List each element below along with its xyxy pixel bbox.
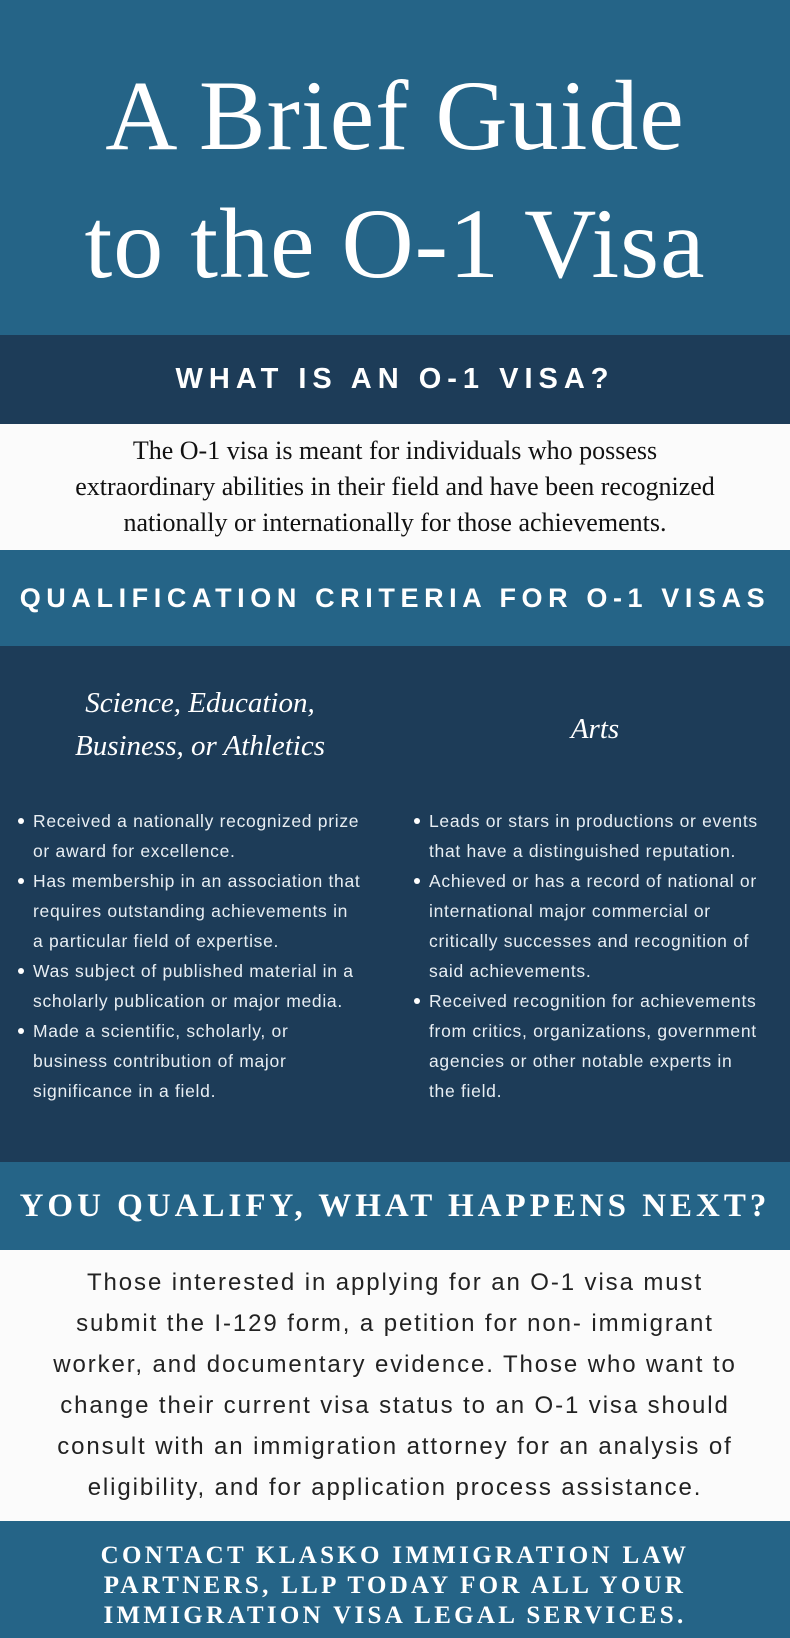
- title: to the O-1 Visa: [85, 188, 705, 299]
- footer: contact: [0, 1521, 790, 1638]
- footer: contact: PARTNERS, LLP TODAY FOR ALL YOUR: [104, 1572, 686, 1599]
- heading: next steps: YOU QUALIFY, WHAT HAPPENS NEXT?: [20, 1188, 770, 1224]
- heading: what is: [0, 335, 790, 424]
- subheading: science: [75, 687, 325, 762]
- title: A Brief Guide: [105, 60, 685, 171]
- header: [0, 0, 790, 335]
- text: definition: extraordinary abilities in their field and have been recognized: [75, 472, 715, 501]
- text: next steps: [0, 1250, 790, 1521]
- list: arts criteria: agencies or other notable experts in: [429, 1051, 732, 1071]
- subheading: science: Science, Education,: [85, 687, 315, 719]
- text: definition: [0, 424, 790, 550]
- text: next steps: worker, and documentary evidence. Those who want to: [53, 1351, 737, 1378]
- list: science criteria: requires outstanding achievements in: [33, 901, 348, 921]
- list: science criteria: a particular field of expertise.: [33, 931, 279, 951]
- list: science criteria: or award for excellence.: [33, 841, 236, 861]
- list: arts criteria: that have a distinguished reputation.: [429, 841, 736, 861]
- list: science criteria: Has membership in an association that: [33, 871, 360, 891]
- list: arts criteria: from critics, organizations, government: [429, 1021, 757, 1041]
- list: arts criteria: Achieved or has a record of national or: [429, 871, 757, 891]
- list: arts criteria: Received recognition for achievements: [429, 991, 756, 1011]
- subheading: arts: Arts: [571, 713, 619, 745]
- list: science criteria: Made a scientific, scholarly, or: [33, 1021, 288, 1041]
- title: [85, 60, 705, 299]
- list: arts criteria: [414, 811, 758, 1101]
- text: next steps: consult with an immigration attorney for an analysis of: [57, 1433, 733, 1460]
- panel: criteria columns: [0, 646, 790, 1162]
- list: science criteria: [18, 811, 360, 1101]
- text: next steps: submit the I-129 form, a petition for non- immigrant: [76, 1310, 714, 1337]
- text: definition: The O-1 visa is meant for individuals who possess: [133, 436, 657, 465]
- list: science criteria: business contribution of major: [33, 1051, 286, 1071]
- text: next steps: Those interested in applying for an O-1 visa must: [87, 1269, 703, 1296]
- text: next steps: change their current visa status to an O-1 visa should: [60, 1392, 730, 1419]
- list: science criteria: Received a nationally recognized prize: [33, 811, 359, 831]
- footer: contact: CONTACT KLASKO IMMIGRATION LAW: [101, 1542, 689, 1569]
- heading: criteria: [0, 550, 790, 646]
- heading: what is: WHAT IS AN O-1 VISA?: [176, 363, 614, 395]
- heading: criteria: QUALIFICATION CRITERIA FOR O-1 VISAS: [20, 583, 770, 613]
- footer: contact: IMMIGRATION VISA LEGAL SERVICES.: [103, 1602, 687, 1629]
- heading: next steps: [0, 1162, 790, 1250]
- list: arts criteria: Leads or stars in productions or events: [429, 811, 758, 831]
- list: arts criteria: critically successes and recognition of: [429, 931, 749, 951]
- list: science criteria: Was subject of published material in a: [33, 961, 354, 981]
- list: arts criteria: the field.: [429, 1081, 502, 1101]
- list: science criteria: scholarly publication or major media.: [33, 991, 343, 1011]
- subheading: science: Business, or Athletics: [75, 730, 325, 762]
- text: next steps: eligibility, and for application process assistance.: [88, 1474, 702, 1501]
- text: definition: nationally or internationally for those achievements.: [124, 508, 666, 537]
- list: arts criteria: international major commercial or: [429, 901, 711, 921]
- list: arts criteria: said achievements.: [429, 961, 591, 981]
- list: science criteria: significance in a field.: [33, 1081, 216, 1101]
